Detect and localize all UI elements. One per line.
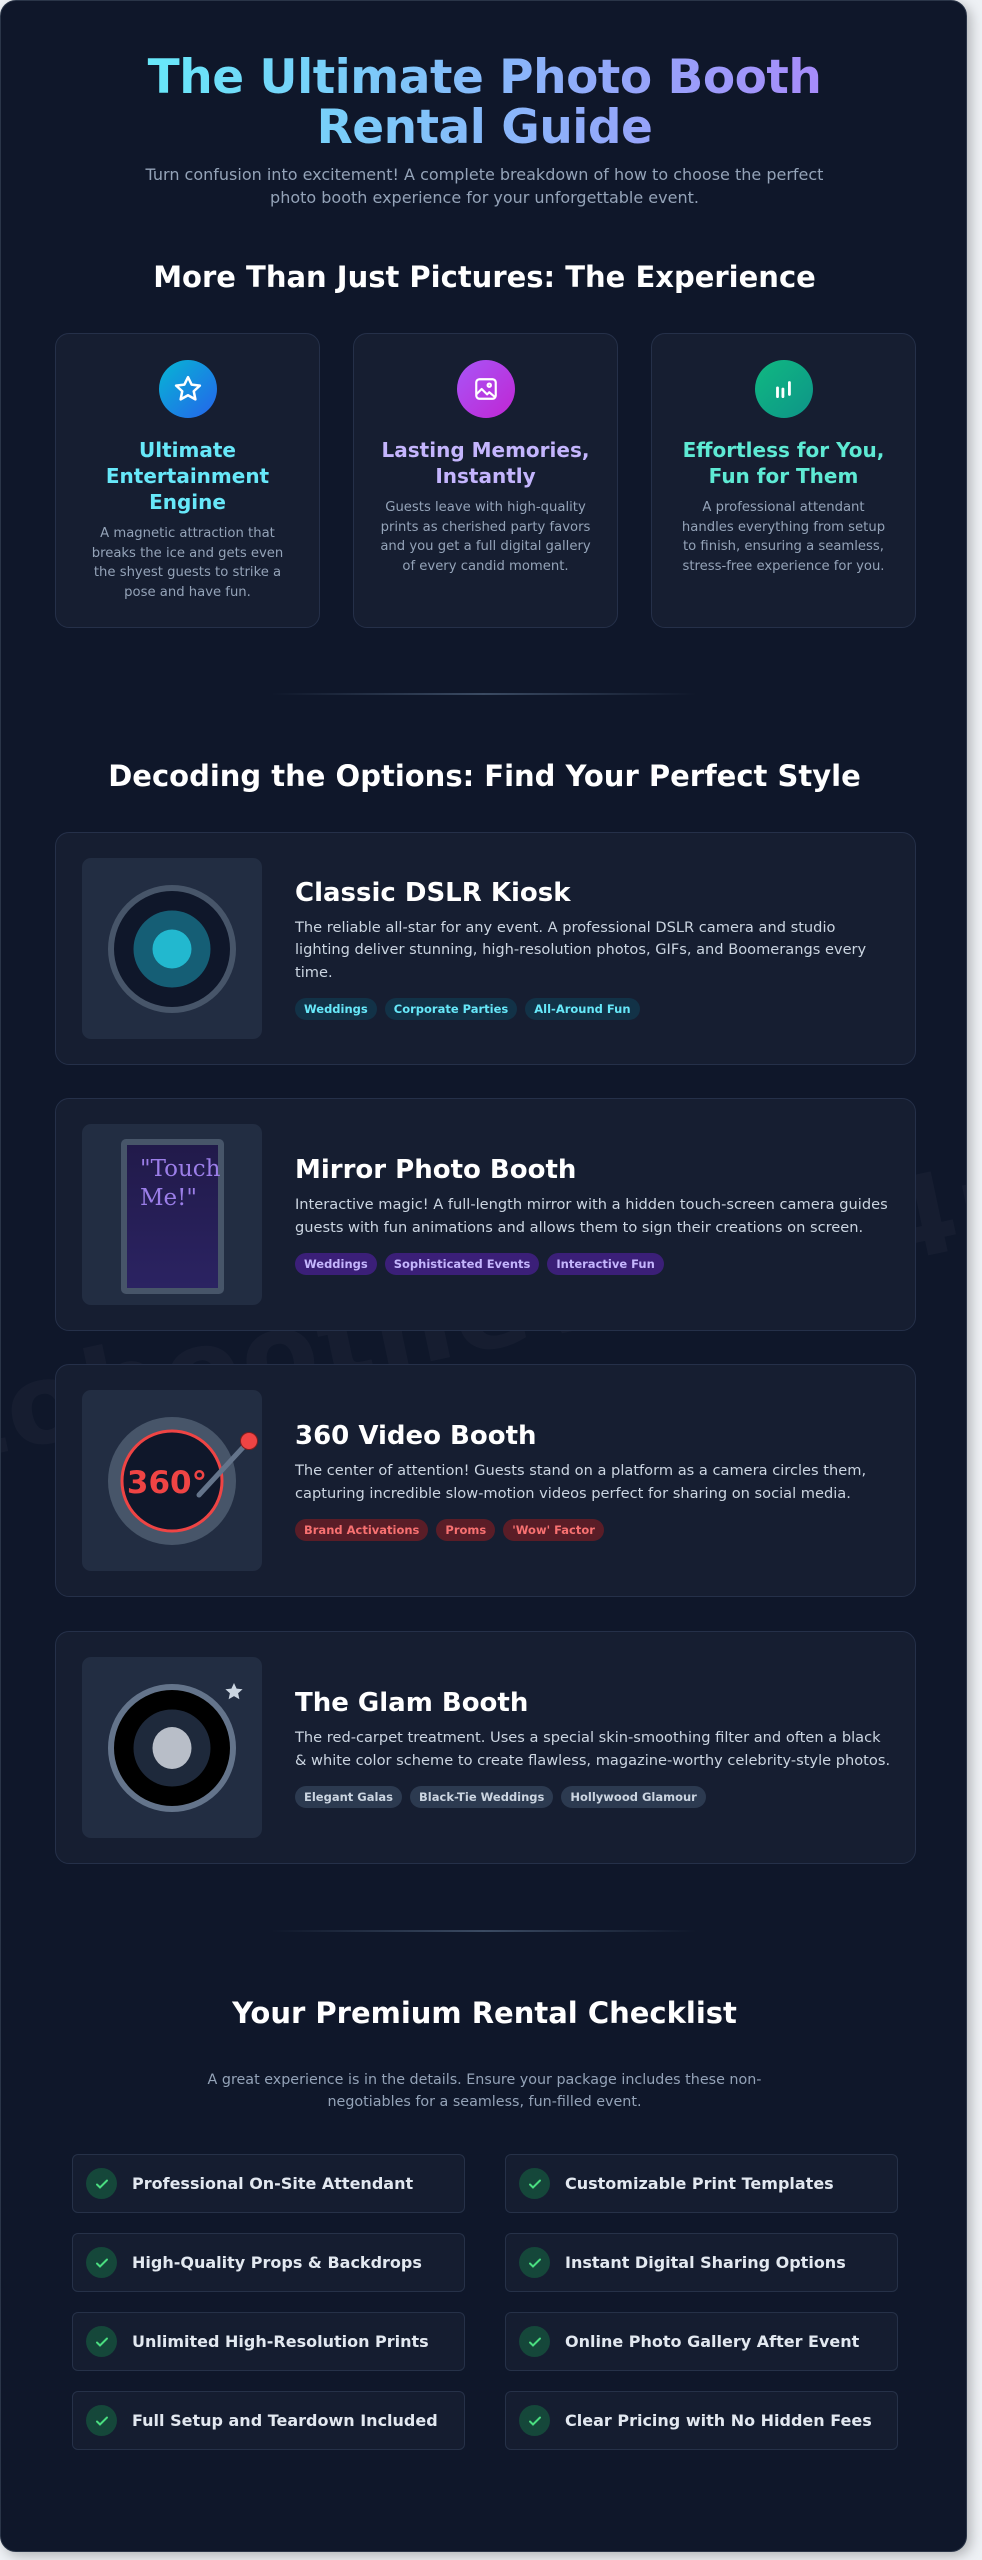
title (1, 53, 968, 153)
text: glam (294, 1688, 890, 1808)
text: classic dslr: Classic DSLR Kiosk (295, 878, 571, 908)
item (505, 2154, 898, 2213)
text: glam: The red-carpet treatment. Uses a special skin-smoothing filter and often a black & white color scheme to create flawless, magazine-worthy celebrity-style photos. (295, 1729, 890, 1768)
item (72, 2154, 465, 2213)
icon: star (158, 360, 216, 418)
subtitle: Turn confusion into excitement! A complete breakdown of how to choose the perfect photo booth experience for your unforgettable event. (146, 165, 823, 207)
heading: checklist: Your Premium Rental Checklist (232, 1996, 737, 2030)
item (72, 2233, 465, 2292)
text: mirror: Interactive Fun (556, 1257, 655, 1271)
text: 360: Proms (445, 1523, 486, 1537)
item (505, 2391, 898, 2450)
item: Unlimited High-Resolution Prints (132, 2332, 429, 2351)
heading: experience: More Than Just Pictures: The Experience (153, 260, 816, 294)
text: glam: Elegant Galas (304, 1790, 393, 1804)
card text: A magnetic attraction that breaks the ice and gets even the shyest guests to strike a pose and have fun. (92, 526, 283, 600)
icon: 360: 360° (127, 1465, 207, 1501)
text: glam: Hollywood Glamour (570, 1790, 697, 1804)
item: High-Quality Props & Backdrops (132, 2253, 422, 2272)
panel: effortless (651, 333, 916, 628)
item: Full Setup and Teardown Included (132, 2411, 438, 2430)
panel: 360 booth (55, 1364, 916, 1597)
checklist grid (72, 2154, 898, 2450)
text: 360: Brand Activations (304, 1523, 419, 1537)
item: Instant Digital Sharing Options (565, 2253, 846, 2272)
item (72, 2312, 465, 2371)
text: 360 (294, 1421, 866, 1541)
text: mirror: Interactive magic! A full-length mirror with a hidden touch-screen camera guides guests with fun animations and allows them to sign their creations on screen. (295, 1196, 888, 1236)
item: Professional On-Site Attendant (132, 2174, 413, 2193)
text: mirror (295, 1155, 888, 1275)
icon: bars (754, 360, 812, 418)
item: Clear Pricing with No Hidden Fees (565, 2411, 872, 2430)
text: classic dslr: The reliable all-star for any event. A professional DSLR camera and studio lighting deliver stunning, high-resolution photos, GIFs, and Boomerangs every time. (295, 919, 866, 981)
item: Customizable Print Templates (565, 2174, 834, 2193)
card title: Effortless for You, Fun for Them (683, 438, 884, 488)
panel: mirror booth (55, 1098, 916, 1331)
text: 360: The center of attention! Guests stand on a platform as a camera circles them, capturing incredible slow-motion videos perfect for sharing on social media. (295, 1462, 866, 1502)
text: classic dslr: All-Around Fun (534, 1002, 631, 1016)
card title: Lasting Memories, Instantly (382, 438, 589, 488)
text: glam: The Glam Booth (295, 1688, 528, 1718)
checklist intro: A great experience is in the details. Ensure your package includes these non-negotiables for a seamless, fun-filled event. (208, 2072, 761, 2110)
text: classic dslr (294, 878, 866, 1020)
card text: A professional attendant handles everything from setup to finish, ensuring a seamless, stress-free experience for you. (682, 500, 885, 574)
text: classic dslr: Weddings (304, 1002, 368, 1016)
text: 360: 'Wow' Factor (512, 1523, 595, 1537)
text: glam: Black-Tie Weddings (419, 1790, 544, 1804)
item (505, 2312, 898, 2371)
text: classic dslr: Corporate Parties (394, 1002, 508, 1016)
text: mirror: Sophisticated Events (394, 1257, 530, 1271)
icon: image (456, 360, 514, 418)
icon: dslr lens (82, 858, 262, 1039)
title: Rental Guide (317, 100, 652, 155)
text: 360: 360 Video Booth (295, 1421, 537, 1451)
item (505, 2233, 898, 2292)
panel: entertainment (55, 333, 320, 628)
icon: glam lens (82, 1657, 262, 1838)
text: mirror: Mirror Photo Booth (295, 1155, 576, 1185)
heading: options: Decoding the Options: Find Your Perfect Style (108, 759, 861, 793)
icon: mirror: "Touch Me!" (140, 1156, 220, 1211)
title: The Ultimate Photo Booth (148, 50, 821, 105)
item (72, 2391, 465, 2450)
panel: memories (353, 333, 618, 628)
icon: mirror (82, 1124, 262, 1305)
panel: glam booth (55, 1631, 916, 1864)
icon: 360 (82, 1390, 262, 1571)
item: Online Photo Gallery After Event (565, 2332, 859, 2351)
panel: classic dslr (55, 832, 916, 1065)
text: mirror: Weddings (304, 1257, 368, 1271)
card text: Guests leave with high-quality prints as cherished party favors and you get a full digital gallery of every candid moment. (380, 500, 591, 574)
card title: Ultimate Entertainment Engine (106, 438, 269, 514)
